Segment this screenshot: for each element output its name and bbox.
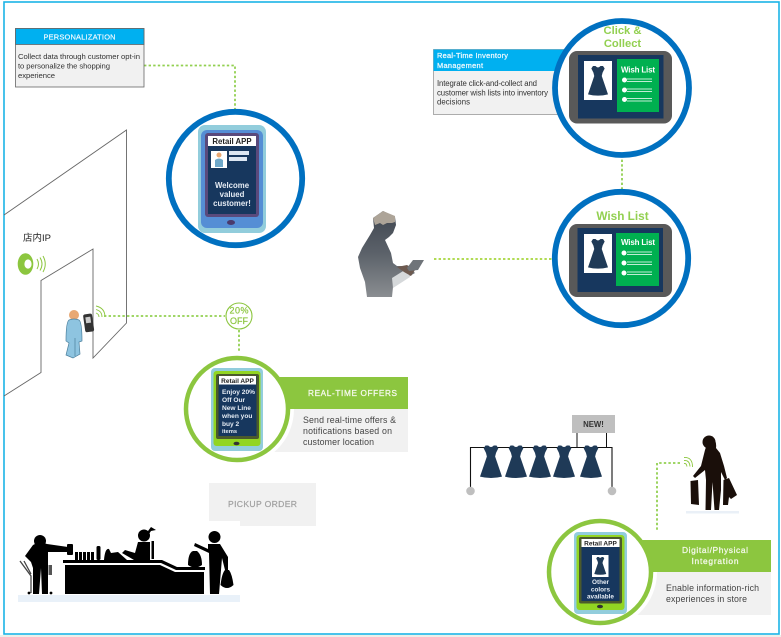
- phone: welcome: Welcome: [215, 181, 250, 190]
- label: in-store IP: 店内IP: [23, 232, 51, 244]
- heading: inventory: Management: [437, 61, 483, 70]
- phone: welcome: Retail APP: [212, 137, 252, 146]
- heading: inventory: Real-Time Inventory: [437, 51, 508, 60]
- heading: click and collect: Click &: [604, 25, 641, 37]
- heading: inventory: [437, 51, 508, 70]
- text: real-time offers body: Send real-time offers &: [303, 415, 396, 425]
- phone: offer: New Line: [222, 405, 251, 412]
- dresses: [480, 446, 602, 478]
- phone: welcome: valued: [220, 190, 245, 199]
- counter: [63, 546, 205, 594]
- badge: 20% off: OFF: [230, 316, 248, 326]
- panel: real-time offers: [180, 352, 408, 466]
- phone: offer: Retail APP: [221, 378, 254, 385]
- heading: digital physical integration: [682, 545, 748, 566]
- circle: click and collect: Collect: [604, 38, 641, 50]
- phone: colors: colors: [591, 586, 611, 594]
- phone: offer: items: [222, 429, 237, 435]
- wall outline: [4, 130, 126, 396]
- circle: colors phone: [549, 521, 651, 623]
- panel: pickup order: [209, 483, 316, 526]
- icon: beacon: [18, 253, 45, 275]
- phone: welcome: customer!: [213, 199, 251, 208]
- phone: colors: [574, 532, 627, 614]
- heading: wish list: Wish List: [596, 209, 649, 223]
- figure: customer with bags: [188, 531, 234, 594]
- text: real-time offers body: notifications based on: [303, 426, 392, 436]
- sign: new: NEW!: [583, 420, 604, 429]
- text: inventory body: Integrate click-and-collect and: [437, 79, 537, 88]
- person with tablet: [358, 211, 424, 297]
- text: personalization body: Collect data through customer opt-in: [18, 52, 140, 61]
- tablet: click and collect: Wish List: [621, 66, 655, 74]
- phone: offer: buy 2: [222, 421, 240, 428]
- circle: click and collect: [555, 21, 689, 155]
- dotted connectors: [104, 66, 680, 530]
- phone: offer: Enjoy 20%: [222, 389, 255, 396]
- panel: personalization: [16, 28, 144, 87]
- figure: customer with cart: [20, 535, 73, 594]
- text: real-time offers body: [303, 415, 396, 447]
- circle: offer phone: [186, 358, 288, 460]
- text: real-time offers body: customer location: [303, 437, 374, 447]
- phone: welcome: [198, 125, 266, 233]
- icon: wireless signal: [684, 457, 692, 467]
- text: inventory body: decisions: [437, 98, 470, 106]
- phone: colors: available: [587, 594, 614, 600]
- phone: colors: Retail APP: [584, 540, 617, 548]
- text: digital physical body: Enable information-rich: [666, 583, 759, 593]
- heading: personalization: PERSONALIZATION: [44, 32, 116, 42]
- phone: offer: Off Our: [222, 397, 246, 404]
- panel: pickup order: PICKUP ORDER: [228, 499, 297, 509]
- heading: digital physical integration: Digital/Physical: [682, 545, 748, 555]
- heading: real-time offers: REAL-TIME OFFERS: [308, 389, 398, 398]
- text: digital physical body: [666, 583, 759, 604]
- text: inventory body: [437, 79, 548, 106]
- phone: colors: Other: [592, 579, 610, 586]
- tablet: wish list: Wish List: [621, 238, 655, 247]
- badge: 20% off: 20%: [230, 306, 248, 316]
- sign: new: [572, 415, 615, 433]
- badge: 20% off: [226, 303, 252, 329]
- panel: digital physical integration: [543, 515, 771, 629]
- illustration: checkout counter: [18, 521, 240, 602]
- heading: digital physical integration: Integration: [692, 556, 739, 566]
- clothing rack: [466, 415, 616, 495]
- text: personalization body: [18, 52, 140, 80]
- text: inventory body: customer wish lists into inventory: [437, 88, 548, 98]
- phone: offer: [211, 368, 263, 451]
- shopper silhouette: [686, 436, 739, 514]
- circle: wish list: [555, 192, 688, 325]
- circle: welcome phone: [169, 112, 302, 245]
- figure: cashier: [122, 527, 156, 560]
- text: digital physical body: experiences in store: [666, 594, 747, 604]
- text: personalization body: experience: [18, 71, 55, 80]
- panel: real-time inventory management: [434, 50, 568, 114]
- icon: customer with phone: [66, 306, 105, 358]
- phone: offer: when you: [221, 413, 252, 420]
- text: personalization body: to personalize the shopping: [18, 62, 110, 70]
